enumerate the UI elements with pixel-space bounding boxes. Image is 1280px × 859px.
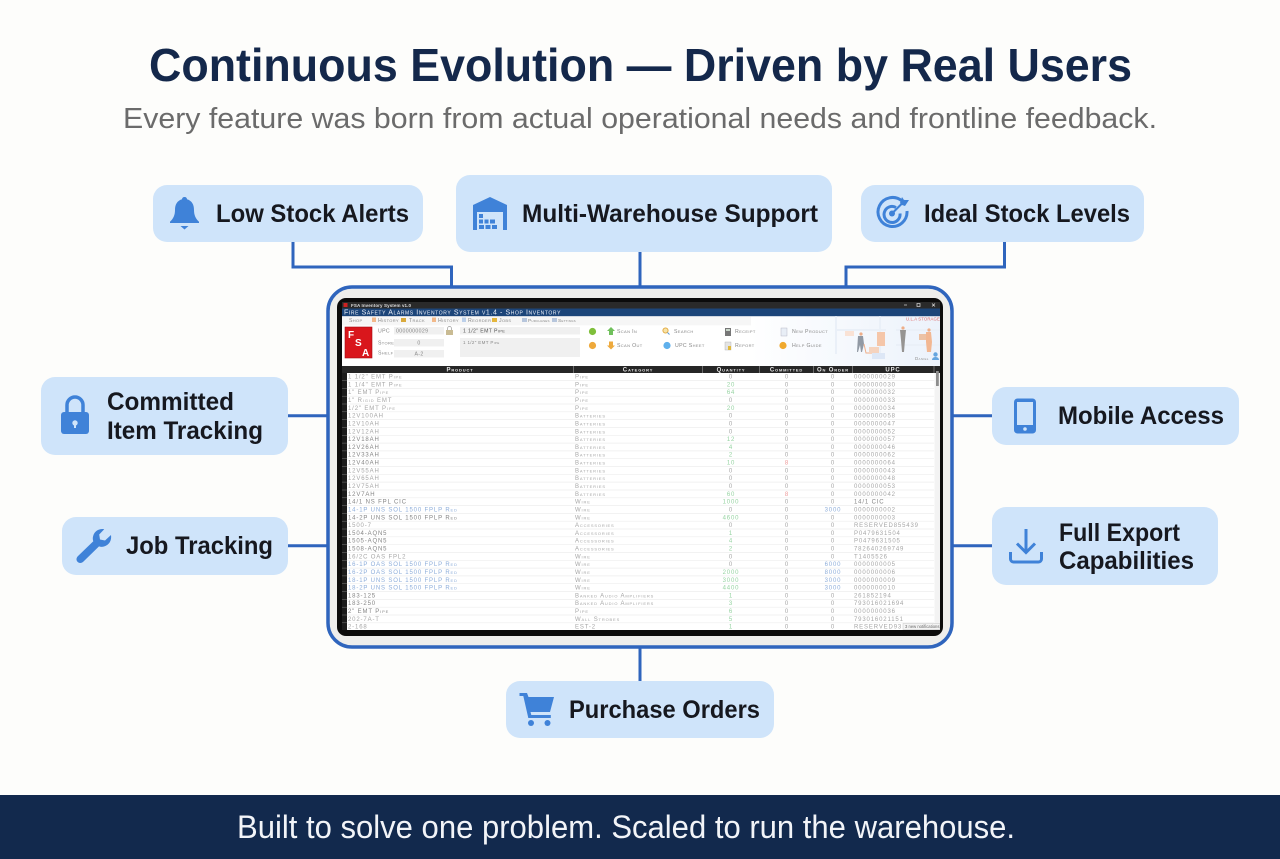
table header: Product bbox=[446, 368, 474, 374]
table rows: 0 bbox=[785, 554, 789, 560]
table rows: 2000 bbox=[723, 570, 739, 576]
app header bar bbox=[342, 308, 940, 316]
table rows: 4 bbox=[729, 445, 733, 451]
table rows: 0 bbox=[785, 398, 789, 404]
table rows: 0 bbox=[831, 523, 835, 529]
table rows: 6000 bbox=[825, 562, 841, 568]
table rows: 8000 bbox=[825, 570, 841, 576]
table rows: 10 bbox=[727, 461, 735, 467]
table rows: 0 bbox=[785, 625, 789, 631]
callout: low stock alerts bbox=[153, 185, 423, 242]
table rows: 12 bbox=[727, 437, 735, 443]
table rows: 0 bbox=[785, 476, 789, 482]
table rows: 0 bbox=[785, 593, 789, 599]
table rows: 18-1P UNS SOL 1500 FPLP Red bbox=[348, 578, 458, 584]
table rows: 0 bbox=[831, 531, 835, 537]
table rows: 0000000033 bbox=[854, 398, 896, 404]
table rows: 4 bbox=[729, 539, 733, 545]
table rows: 1" EMT Pipe bbox=[348, 390, 389, 396]
table rows: 12V7AH bbox=[348, 492, 375, 498]
table rows: 0 bbox=[831, 461, 835, 467]
table header: UPC bbox=[885, 368, 901, 374]
icon: phone bbox=[1014, 398, 1036, 434]
table rows: Accessories bbox=[575, 523, 615, 529]
table rows: 18-2P UNS SOL 1500 FPLP Red bbox=[348, 586, 458, 592]
table rows: 0 bbox=[831, 484, 835, 490]
callout: low stock alerts: Low Stock Alerts bbox=[216, 200, 409, 228]
table rows: Batteries bbox=[575, 461, 606, 467]
table rows: Batteries bbox=[575, 468, 606, 474]
logo: FSA: A bbox=[362, 348, 369, 359]
item detail fields: Store bbox=[378, 340, 394, 346]
table rows: 0 bbox=[785, 578, 789, 584]
action buttons: New Product bbox=[792, 329, 828, 335]
table rows: 12V75AH bbox=[348, 484, 380, 490]
table header: Category bbox=[623, 368, 653, 374]
row header stripe bbox=[342, 373, 347, 630]
table rows: 0000000064 bbox=[854, 461, 896, 467]
table rows: Pipe bbox=[575, 609, 589, 615]
table rows bbox=[348, 375, 919, 631]
item detail fields: 1 1/2" EMT Pipe bbox=[463, 329, 505, 335]
action buttons: Scan Out bbox=[617, 343, 643, 349]
callout: purchase orders: Purchase Orders bbox=[569, 696, 760, 724]
table rows: 0 bbox=[729, 398, 733, 404]
table rows: 0000000036 bbox=[854, 609, 896, 615]
table header: Committed bbox=[770, 368, 803, 374]
item detail fields: 0000000029 bbox=[396, 328, 428, 334]
table rows: RESERVED93 bbox=[854, 625, 902, 631]
callout: ideal stock levels: Ideal Stock Levels bbox=[924, 200, 1130, 228]
table rows: 0 bbox=[785, 601, 789, 607]
table rows: 0 bbox=[831, 625, 835, 631]
table rows: 1504-AQN5 bbox=[348, 531, 387, 537]
toolbar: Settings bbox=[558, 318, 576, 324]
table rows: 261852194 bbox=[854, 593, 892, 599]
table rows: 1 bbox=[729, 625, 733, 631]
callout: mobile access: Mobile Access bbox=[1058, 402, 1224, 430]
table rows: 0 bbox=[831, 546, 835, 552]
table rows: 20 bbox=[727, 406, 735, 412]
table rows: 183-125 bbox=[348, 593, 376, 599]
table rows: 0 bbox=[785, 531, 789, 537]
device bezel bbox=[337, 298, 943, 636]
table rows: 16-2P OAS SOL 1500 FPLP Red bbox=[348, 570, 458, 576]
table rows: 12V100AH bbox=[348, 414, 384, 420]
table rows: Pipe bbox=[575, 406, 589, 412]
table rows: 3000 bbox=[825, 578, 841, 584]
action buttons: Receipt bbox=[735, 329, 756, 335]
callout: multi-warehouse support bbox=[456, 175, 832, 252]
table rows: 0000000042 bbox=[854, 492, 896, 498]
table rows: EST-2 bbox=[575, 625, 596, 631]
table rows: Batteries bbox=[575, 484, 606, 490]
table rows: Accessories bbox=[575, 539, 615, 545]
table rows: 0 bbox=[831, 492, 835, 498]
table rows: 0 bbox=[831, 422, 835, 428]
table rows: 1508-AQN5 bbox=[348, 546, 387, 552]
table rows: 782640269749 bbox=[854, 546, 904, 552]
table rows: 0000000009 bbox=[854, 578, 896, 584]
table rows: 0000000006 bbox=[854, 570, 896, 576]
table rows: Batteries bbox=[575, 445, 606, 451]
table rows: 0000000003 bbox=[854, 515, 896, 521]
table rows: 0 bbox=[785, 453, 789, 459]
table rows: 0 bbox=[785, 586, 789, 592]
table rows: 60 bbox=[727, 492, 735, 498]
table rows: 0 bbox=[729, 507, 733, 513]
table rows: 0 bbox=[831, 539, 835, 545]
table rows: P0479631504 bbox=[854, 531, 901, 537]
table rows: 0 bbox=[831, 476, 835, 482]
table rows: Batteries bbox=[575, 429, 606, 435]
table rows: 1 1/2" EMT Pipe bbox=[348, 375, 403, 381]
table rows: 0 bbox=[785, 437, 789, 443]
table rows: 183-250 bbox=[348, 601, 376, 607]
table rows: 0 bbox=[729, 414, 733, 420]
table rows: 16/2C OAS FPL2 bbox=[348, 554, 406, 560]
table rows: 0 bbox=[831, 453, 835, 459]
table rows: 0 bbox=[729, 562, 733, 568]
table rows: 8 bbox=[785, 492, 789, 498]
table rows: 0 bbox=[831, 445, 835, 451]
table rows: Wire bbox=[575, 578, 591, 584]
table rows: 12V55AH bbox=[348, 468, 380, 474]
table rows: 1" Rigid EMT bbox=[348, 398, 392, 404]
table rows: 0 bbox=[729, 429, 733, 435]
table rows: 0 bbox=[785, 539, 789, 545]
table header bbox=[342, 366, 940, 374]
table rows: 3 bbox=[729, 601, 733, 607]
table rows: 14-2P UNS SOL 1500 FPLP Red bbox=[348, 515, 458, 521]
table rows: Wire bbox=[575, 570, 591, 576]
table rows: 1 1/4" EMT Pipe bbox=[348, 382, 403, 388]
table rows: 0 bbox=[729, 523, 733, 529]
table rows: 0 bbox=[785, 375, 789, 381]
table rows: 202-7A-T bbox=[348, 617, 380, 623]
table rows: 0 bbox=[831, 554, 835, 560]
table rows: 0 bbox=[785, 523, 789, 529]
table rows: 0000000002 bbox=[854, 507, 896, 513]
table rows: 0000000062 bbox=[854, 453, 896, 459]
table rows: 0 bbox=[831, 398, 835, 404]
table rows: 0 bbox=[785, 546, 789, 552]
table rows: 4400 bbox=[723, 586, 739, 592]
table rows: 4600 bbox=[723, 515, 739, 521]
table rows: 0000000043 bbox=[854, 468, 896, 474]
table rows: 0 bbox=[831, 617, 835, 623]
table rows: 5 bbox=[729, 617, 733, 623]
table rows: Banked Audio Amplifiers bbox=[575, 601, 654, 607]
table rows: 1500-7 bbox=[348, 523, 372, 529]
footer banner bbox=[0, 795, 1280, 859]
action buttons bbox=[589, 327, 828, 350]
table rows: 0 bbox=[785, 414, 789, 420]
icon: wrench bbox=[76, 529, 111, 563]
table rows: Accessories bbox=[575, 546, 615, 552]
table rows: 0 bbox=[729, 554, 733, 560]
table rows: 0000000005 bbox=[854, 562, 896, 568]
callout: committed item tracking: Item Tracking bbox=[107, 417, 263, 445]
table rows: Pipe bbox=[575, 390, 589, 396]
table rows: 2" EMT Pipe bbox=[348, 609, 389, 615]
table rows: 14-1P UNS SOL 1500 FPLP Red bbox=[348, 507, 458, 513]
table rows: Wire bbox=[575, 500, 591, 506]
table rows: Batteries bbox=[575, 414, 606, 420]
table rows: T1405526 bbox=[854, 554, 888, 560]
panel: app screenshot frame bbox=[328, 287, 952, 647]
table rows: Wall Strobes bbox=[575, 617, 620, 623]
table header: Quantity bbox=[717, 368, 745, 374]
title: Continuous Evolution — Driven by Real Users bbox=[149, 39, 1132, 91]
warehouse illustration: U.L.A STORAGE bbox=[906, 316, 940, 322]
table rows: Batteries bbox=[575, 453, 606, 459]
table rows: P0479631505 bbox=[854, 539, 901, 545]
table rows: 20 bbox=[727, 382, 735, 388]
connector lines bbox=[288, 242, 1004, 681]
table rows: Wire bbox=[575, 586, 591, 592]
table rows: 0000000029 bbox=[854, 375, 896, 381]
table rows: 0 bbox=[785, 390, 789, 396]
table rows: 12V65AH bbox=[348, 476, 380, 482]
toolbar: History bbox=[438, 318, 459, 324]
toolbar: Shop bbox=[349, 318, 363, 324]
table rows: 0000000052 bbox=[854, 429, 896, 435]
action buttons: Report bbox=[735, 343, 755, 349]
table rows: 0 bbox=[785, 562, 789, 568]
table rows: 0000000046 bbox=[854, 445, 896, 451]
action buttons: Search bbox=[674, 329, 694, 335]
table rows: 0 bbox=[785, 570, 789, 576]
toolbar: Track bbox=[409, 318, 425, 324]
logo: FSA bbox=[345, 327, 372, 359]
window title bar bbox=[342, 302, 940, 308]
table rows: 12V12AH bbox=[348, 429, 380, 435]
table rows: 1 bbox=[729, 593, 733, 599]
table rows: 0 bbox=[831, 468, 835, 474]
table rows: Pipe bbox=[575, 382, 589, 388]
table rows: Batteries bbox=[575, 492, 606, 498]
table rows: 64 bbox=[727, 390, 735, 396]
icon: download bbox=[1010, 529, 1042, 562]
table rows: 0000000057 bbox=[854, 437, 896, 443]
action buttons: Scan In bbox=[617, 329, 637, 335]
table rows: 0 bbox=[729, 484, 733, 490]
footer banner: Built to solve one problem. Scaled to run the warehouse. bbox=[237, 809, 1015, 845]
table rows: 0 bbox=[785, 609, 789, 615]
table rows: 14/1 NS FPL CIC bbox=[348, 500, 407, 506]
icon: bell bbox=[170, 197, 199, 230]
callout: mobile access bbox=[992, 387, 1239, 445]
table rows: Banked Audio Amplifiers bbox=[575, 593, 654, 599]
table rows: Wire bbox=[575, 562, 591, 568]
table rows: 8 bbox=[785, 461, 789, 467]
table rows: 0 bbox=[831, 390, 835, 396]
table rows: 0 bbox=[831, 601, 835, 607]
table rows: 0 bbox=[785, 484, 789, 490]
action buttons: Help Guide bbox=[792, 343, 822, 349]
callout: job tracking bbox=[62, 517, 288, 575]
subtitle: Every feature was born from actual operational needs and frontline feedback. bbox=[123, 103, 1157, 135]
table rows: Batteries bbox=[575, 476, 606, 482]
action buttons: UPC Sheet bbox=[675, 343, 705, 349]
toolbar: Reorder bbox=[468, 318, 491, 324]
table rows: 2 bbox=[729, 546, 733, 552]
table rows: 6 bbox=[729, 609, 733, 615]
table rows: 0000000048 bbox=[854, 476, 896, 482]
table rows: 1/2" EMT Pipe bbox=[348, 406, 396, 412]
table rows: 0 bbox=[729, 476, 733, 482]
table rows: 0 bbox=[785, 468, 789, 474]
table rows: Pipe bbox=[575, 375, 589, 381]
callout: purchase orders bbox=[506, 681, 774, 738]
table rows: 0 bbox=[785, 422, 789, 428]
table rows: Wire bbox=[575, 507, 591, 513]
table rows: 12V26AH bbox=[348, 445, 380, 451]
table rows: 3000 bbox=[825, 586, 841, 592]
table rows: 0 bbox=[831, 429, 835, 435]
table rows: 0 bbox=[831, 609, 835, 615]
table rows: 0 bbox=[785, 382, 789, 388]
table rows: 0 bbox=[831, 406, 835, 412]
table rows: Batteries bbox=[575, 437, 606, 443]
item detail fields: UPC bbox=[378, 328, 390, 334]
table rows: Accessories bbox=[575, 531, 615, 537]
table rows: 12V40AH bbox=[348, 461, 380, 467]
table rows: 0 bbox=[785, 515, 789, 521]
item detail fields bbox=[378, 326, 580, 358]
table rows: 0000000053 bbox=[854, 484, 896, 490]
table rows: 0000000032 bbox=[854, 390, 896, 396]
callout: committed item tracking bbox=[41, 377, 288, 455]
table rows: 793016021694 bbox=[854, 601, 904, 607]
table rows: 0 bbox=[785, 617, 789, 623]
table rows: 12V10AH bbox=[348, 422, 380, 428]
table rows: Batteries bbox=[575, 422, 606, 428]
table rows: 0000000047 bbox=[854, 422, 896, 428]
table rows: 0 bbox=[831, 593, 835, 599]
table rows: 0 bbox=[831, 500, 835, 506]
table rows: 0 bbox=[729, 468, 733, 474]
table rows: 0 bbox=[785, 429, 789, 435]
scrollbar bbox=[934, 371, 940, 630]
table rows: 793016021151 bbox=[854, 617, 904, 623]
table rows: 3000 bbox=[723, 578, 739, 584]
toolbar: Purchases bbox=[528, 318, 550, 324]
table rows: 3000 bbox=[825, 507, 841, 513]
callout: full export capabilities: Capabilities bbox=[1059, 547, 1194, 575]
table rows: 12V33AH bbox=[348, 453, 380, 459]
warehouse illustration: Daniel bbox=[915, 356, 929, 361]
toolbar: Jobs bbox=[499, 318, 511, 324]
table rows: RESERVED855439 bbox=[854, 523, 919, 529]
callout: ideal stock levels bbox=[861, 185, 1144, 242]
callout: full export capabilities: Full Export bbox=[1059, 519, 1181, 547]
table rows: 0 bbox=[729, 422, 733, 428]
table rows: Wire bbox=[575, 554, 591, 560]
table rows: 0 bbox=[831, 515, 835, 521]
app window bbox=[342, 302, 940, 631]
table rows: 0000000034 bbox=[854, 406, 896, 412]
table rows: 2-168 bbox=[348, 625, 368, 631]
table rows: 1505-AQN5 bbox=[348, 539, 387, 545]
table rows: 0 bbox=[831, 414, 835, 420]
table rows: 0000000030 bbox=[854, 382, 896, 388]
toolbar: History bbox=[378, 318, 399, 324]
app header bar: Fire Safety Alarms Inventory System v1.4 - Shop Inventory bbox=[344, 310, 561, 316]
table rows: 0 bbox=[785, 406, 789, 412]
icon: target bbox=[878, 197, 909, 226]
callout: multi-warehouse support: Multi-Warehouse Support bbox=[522, 200, 819, 228]
table rows: 0000000010 bbox=[854, 586, 896, 592]
table rows: 0 bbox=[831, 437, 835, 443]
table rows: 0 bbox=[785, 507, 789, 513]
icon: shopping cart bbox=[520, 693, 554, 726]
table header: On Order bbox=[817, 368, 849, 374]
table rows: 0 bbox=[785, 500, 789, 506]
table rows: 0 bbox=[729, 375, 733, 381]
callout: full export capabilities bbox=[992, 507, 1218, 585]
callout: job tracking: Job Tracking bbox=[126, 532, 273, 560]
window title bar: FSA Inventory System v1.0 bbox=[351, 303, 412, 308]
table rows: Pipe bbox=[575, 398, 589, 404]
table rows: 14/1 CIC bbox=[854, 500, 884, 506]
icon: warehouse bbox=[473, 197, 507, 230]
logo: FSA: S bbox=[355, 338, 362, 349]
table rows: 0 bbox=[831, 382, 835, 388]
table rows: 16-1P OAS SOL 1500 FPLP Red bbox=[348, 562, 458, 568]
table rows: 1000 bbox=[723, 500, 739, 506]
item detail fields: 1 1/2" EMT Pipe bbox=[463, 340, 500, 345]
table rows: 12V18AH bbox=[348, 437, 380, 443]
table grid lines bbox=[347, 381, 934, 623]
notification toast: 3 new notifications bbox=[905, 624, 939, 629]
toolbar bbox=[342, 316, 751, 325]
table rows: 1 bbox=[729, 531, 733, 537]
table rows: 0 bbox=[831, 375, 835, 381]
table rows: 0000000058 bbox=[854, 414, 896, 420]
table rows: 2 bbox=[729, 453, 733, 459]
item detail fields: Shelf bbox=[378, 350, 394, 356]
warehouse illustration bbox=[751, 316, 940, 366]
item detail fields: A-2 bbox=[414, 352, 424, 358]
table rows: 0 bbox=[785, 445, 789, 451]
item detail fields: 0 bbox=[417, 340, 421, 346]
callout: committed item tracking: Committed bbox=[107, 388, 234, 416]
icon: padlock bbox=[61, 397, 89, 434]
table rows: Wire bbox=[575, 515, 591, 521]
logo: FSA: F bbox=[348, 330, 354, 341]
